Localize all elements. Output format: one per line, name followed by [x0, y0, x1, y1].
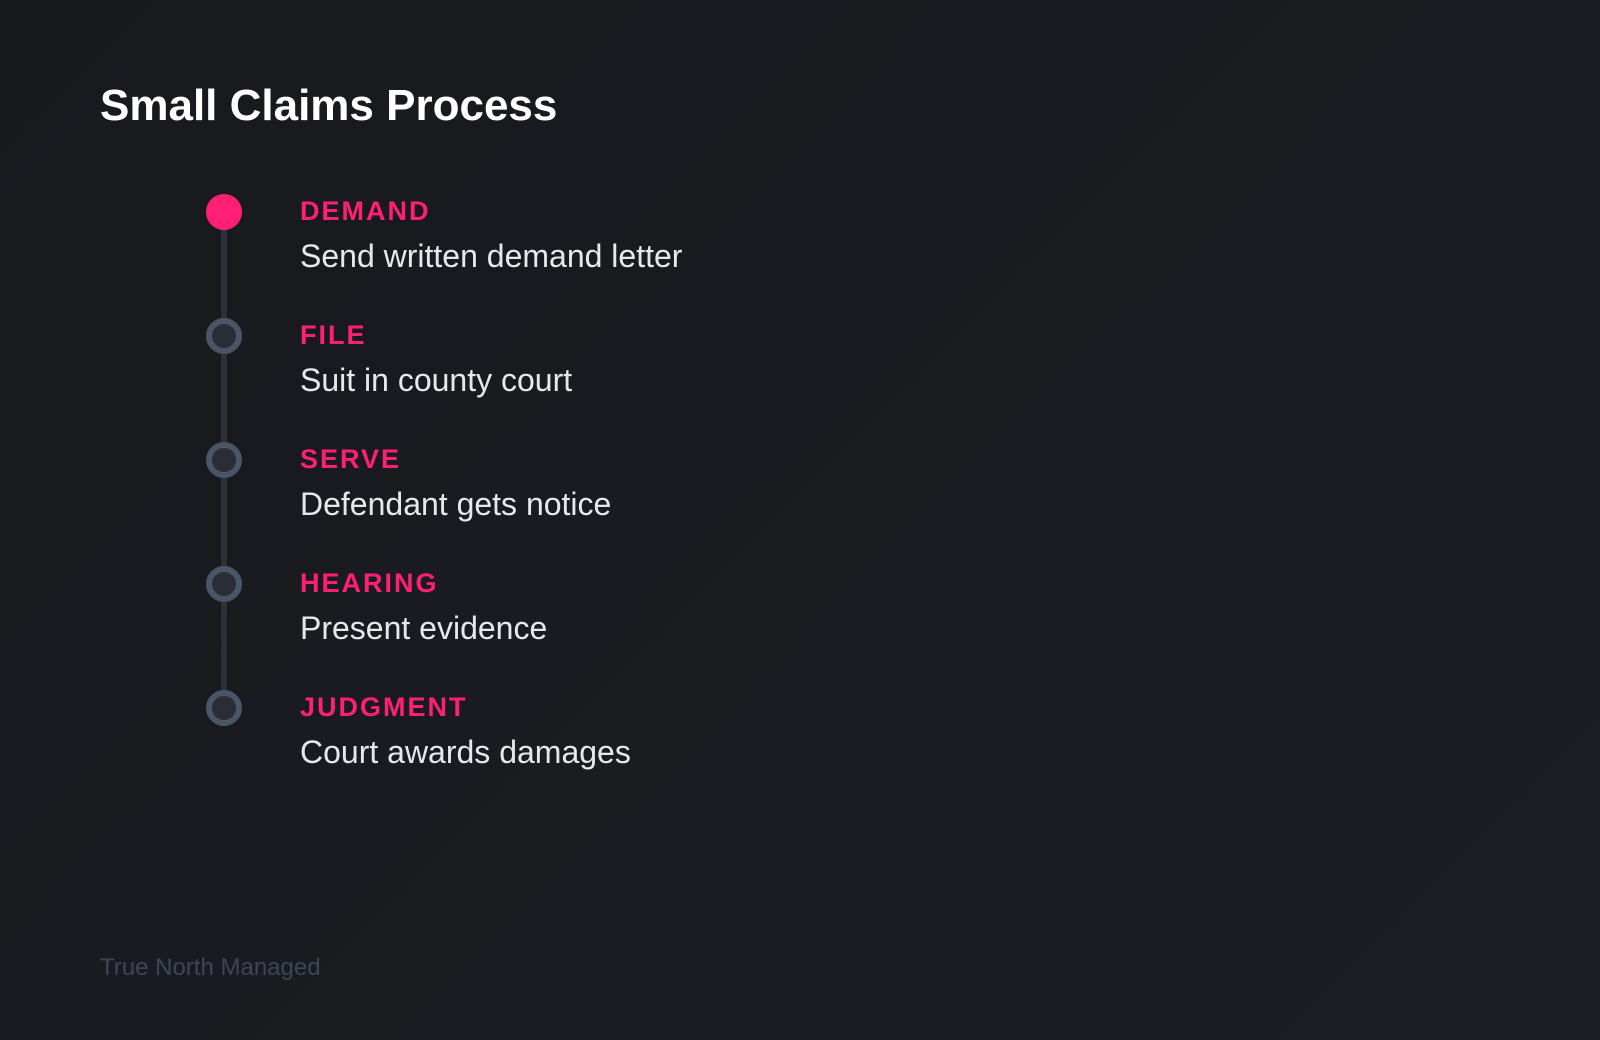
- step: demand: Send written demand letter: [300, 238, 682, 274]
- step: judgment: JUDGMENT: [300, 692, 468, 722]
- step: hearing: [206, 566, 547, 646]
- step: demand: [206, 194, 682, 274]
- step: file: FILE: [300, 320, 366, 350]
- step: serve: Defendant gets notice: [300, 486, 611, 522]
- step: hearing: Present evidence: [300, 610, 547, 646]
- step: demand: DEMAND: [300, 196, 430, 226]
- step: serve: SERVE: [300, 444, 401, 474]
- step: hearing: HEARING: [300, 568, 439, 598]
- footer: True North Managed: [100, 954, 321, 981]
- step: file: Suit in county court: [300, 362, 572, 398]
- step: file: [206, 318, 572, 398]
- step: judgment: [206, 690, 631, 770]
- title: Small Claims Process: [100, 81, 557, 130]
- timeline line: [221, 212, 227, 708]
- step: serve: [206, 442, 611, 522]
- step: judgment: Court awards damages: [300, 734, 631, 770]
